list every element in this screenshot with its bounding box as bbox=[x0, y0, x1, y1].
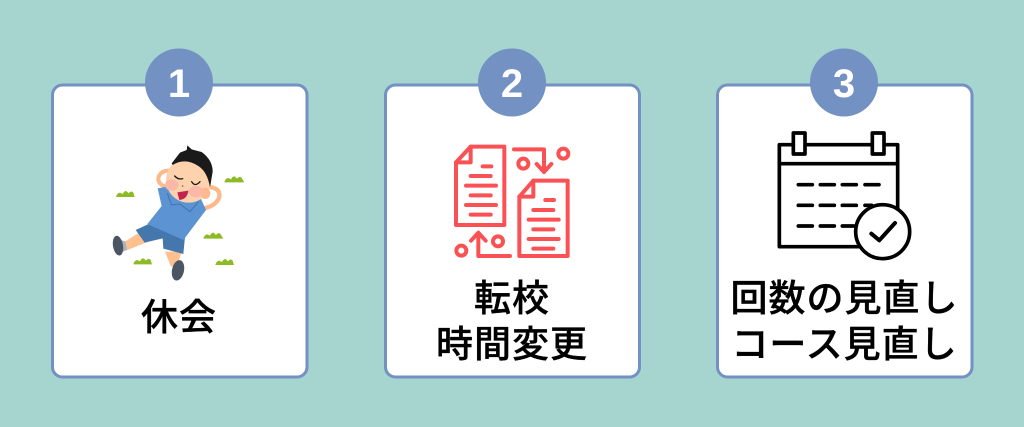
icon: swapping documents bbox=[456, 147, 568, 256]
number badge 1: 1 bbox=[168, 62, 190, 106]
icon: boy lying on grass bbox=[111, 145, 244, 282]
number badge 3 bbox=[810, 48, 878, 116]
heading: transfer and time change bbox=[436, 278, 588, 365]
heading: transfer and time change: 時間変更 bbox=[436, 324, 588, 365]
heading: review frequency and course bbox=[730, 278, 958, 365]
number badge 1 bbox=[145, 48, 213, 116]
number badge 2: 2 bbox=[501, 62, 523, 106]
panel: 2 transfer bbox=[386, 48, 640, 377]
panel: 3 review bbox=[718, 48, 972, 377]
panel: 1 rest bbox=[52, 48, 307, 377]
heading: review frequency and course: コース見直し bbox=[731, 324, 958, 365]
icon: calendar with check bbox=[779, 133, 910, 259]
heading: transfer and time change: 転校 bbox=[474, 278, 550, 319]
number badge 3: 3 bbox=[833, 62, 855, 106]
heading: take a break: 休会 bbox=[141, 297, 217, 338]
heading: review frequency and course: 回数の見直し bbox=[730, 278, 958, 319]
number badge 2 bbox=[478, 48, 546, 116]
